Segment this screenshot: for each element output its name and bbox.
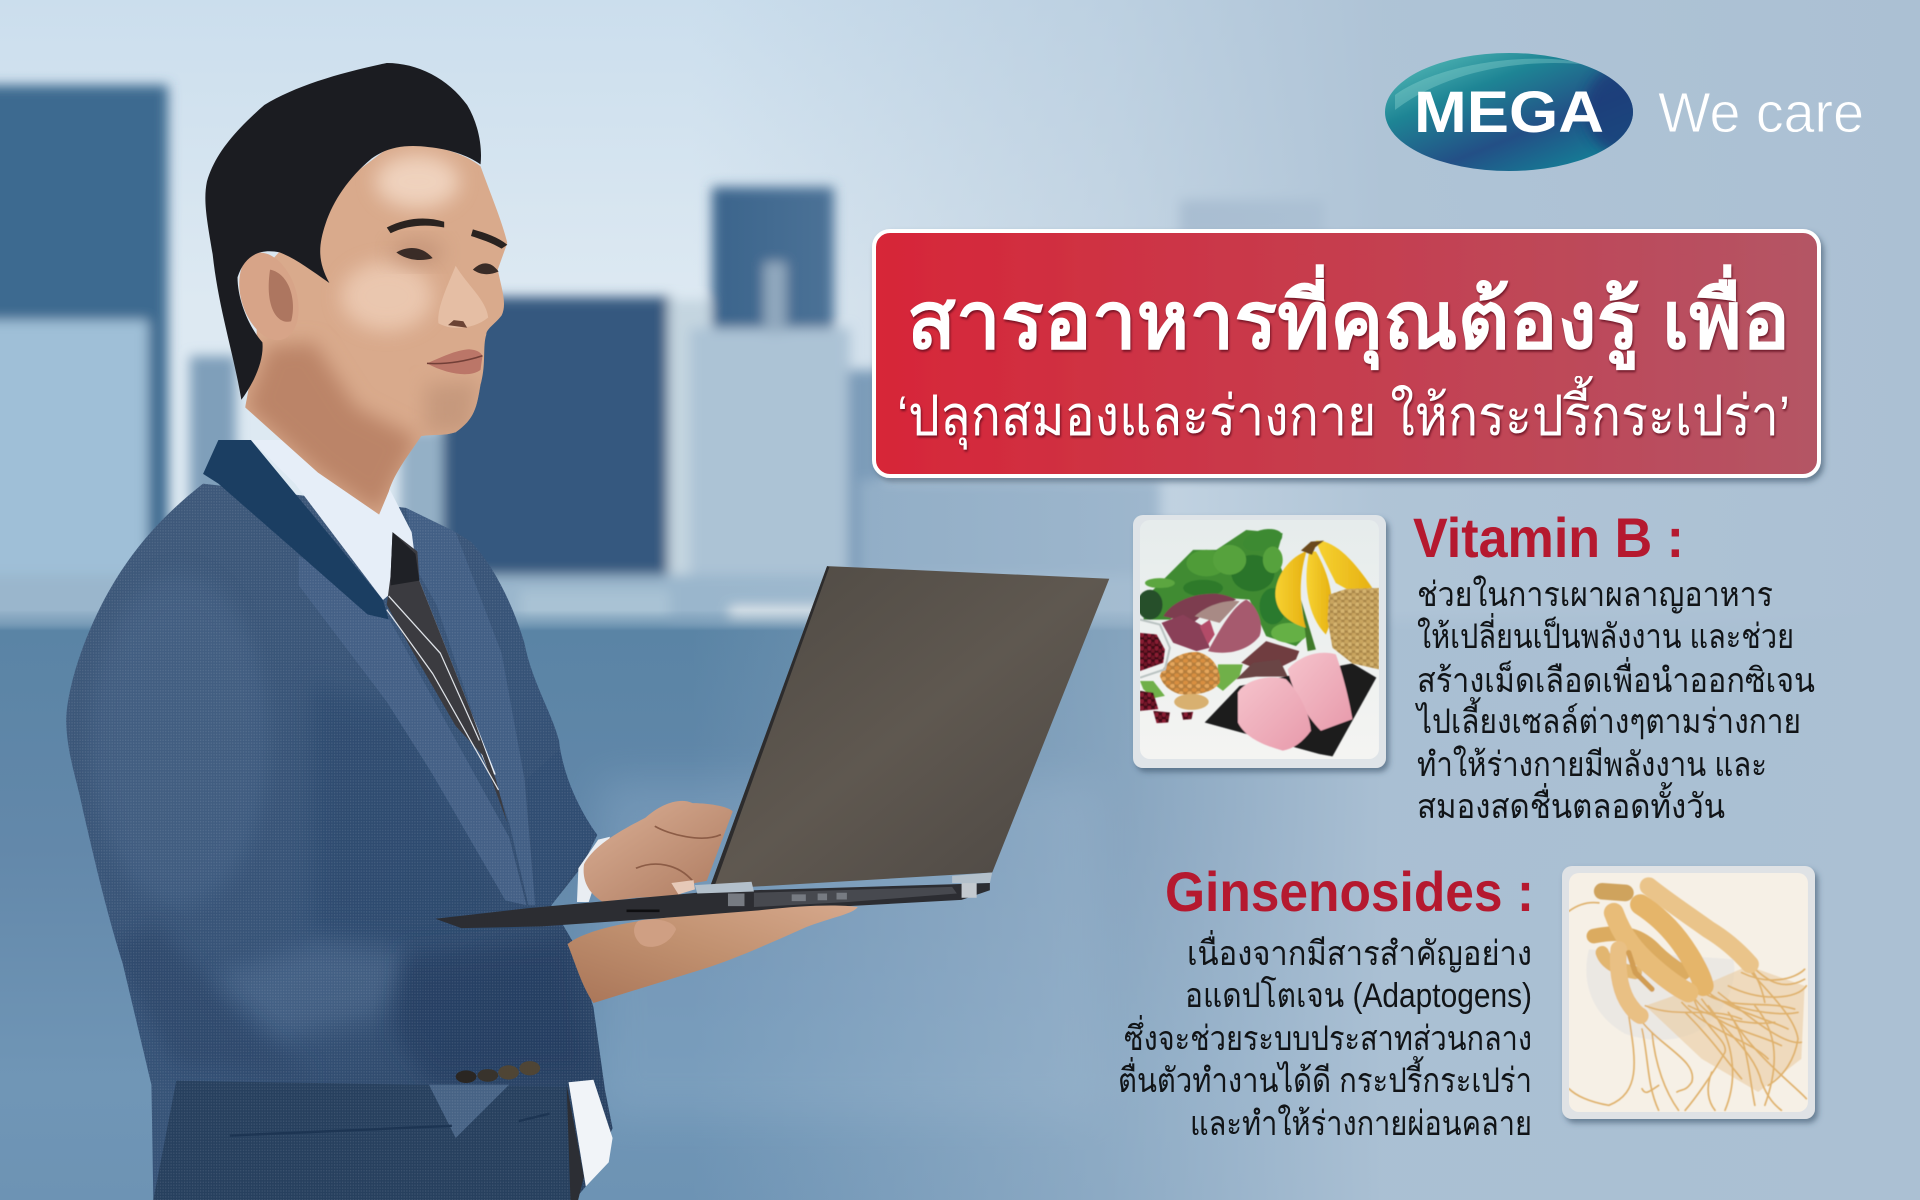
person: businessman with laptop: [50, 63, 1109, 1200]
shirt collar: [251, 440, 496, 774]
text block: Ginsenosides description: ตื่นตัวทำงานได้ดี กระปรี้กระเปร่า: [1118, 1056, 1532, 1100]
logo: MEGA We care: [1385, 53, 1864, 171]
jacket navy collar: [203, 440, 389, 619]
logo badge: MEGA: [1414, 80, 1604, 145]
lower hand: [568, 905, 858, 1003]
text block: Ginsenosides description: ซึ่งจะช่วยระบบประสาทส่วนกลาง: [1124, 1015, 1532, 1058]
rootlet mass: [1645, 966, 1805, 1092]
jar of soybeans: [1328, 588, 1379, 669]
logo tagline: We care: [1658, 81, 1864, 145]
text block: Ginsenosides description: [1118, 930, 1532, 1143]
text block: Vitamin B description: ช่วยในการเผาผลาญอาหาร: [1417, 575, 1773, 614]
text block: Ginsenosides description: เนื่องจากมีสารสำคัญอย่าง: [1187, 930, 1532, 973]
ear: [229, 245, 309, 348]
bean bowl: [1160, 652, 1220, 695]
head: [205, 63, 528, 518]
text block: Vitamin B description: สร้างเม็ดเลือดเพื่อนำออกซิเจน: [1417, 657, 1815, 700]
main roots: [1594, 886, 1750, 1016]
text block: Vitamin B description: ทำให้ร่างกายมีพลังงาน และ: [1417, 745, 1767, 784]
purple meats: [1162, 594, 1299, 679]
fine rootlets: [1569, 903, 1806, 1110]
black plate: [1205, 663, 1376, 756]
text block: Ginsenosides description: และทำให้ร่างกายผ่อนคลาย: [1190, 1104, 1532, 1143]
tie: [387, 532, 507, 823]
text block: Ginsenosides description: อแดปโตเจน (Adaptogens): [1185, 976, 1532, 1015]
text block: Vitamin B description: [1414, 575, 1815, 826]
text block: Vitamin B description: ให้เปลี่ยนเป็นพลังงาน และช่วย: [1417, 613, 1794, 656]
heading: Ginsenosides: Ginsenosides :: [1165, 860, 1534, 923]
face and neck: [245, 146, 508, 514]
red bean jar: [1140, 633, 1165, 671]
text block: Vitamin B description: ไปเลี้ยงเซลล์ต่างๆตามร่างกาย: [1414, 697, 1801, 741]
greens: [1137, 525, 1316, 698]
title line 1: สารอาหารที่คุณต้องรู้ เพื่อ: [907, 264, 1790, 371]
logo badge: [1385, 53, 1633, 171]
bananas: [1275, 541, 1372, 635]
laptop base: [435, 883, 990, 928]
panel: Vitamin B food photo: [1133, 515, 1386, 768]
bowl: [1586, 949, 1734, 1040]
sleeve buttons: [456, 1061, 540, 1083]
laptop lid: [709, 566, 1109, 889]
heading: Vitamin B: Vitamin B :: [1413, 506, 1684, 569]
laptop with hands: [435, 566, 1109, 1003]
title line 2: ‘ปลุกสมองและร่างกาย ให้กระปรี้กระเปร่า’: [897, 376, 1790, 450]
cuff: [577, 837, 610, 902]
shirt tail and lower tie: [567, 1080, 613, 1200]
jacket: [66, 484, 612, 1200]
facial features: [387, 219, 507, 374]
pink meats: [1288, 653, 1352, 731]
panel: ginseng photo: [1562, 866, 1815, 1119]
upper hand: [584, 801, 733, 902]
hair: [205, 63, 481, 400]
text block: Vitamin B description: สมองสดชื่นตลอดทั้งวัน: [1417, 782, 1725, 826]
title banner: [874, 231, 1819, 476]
